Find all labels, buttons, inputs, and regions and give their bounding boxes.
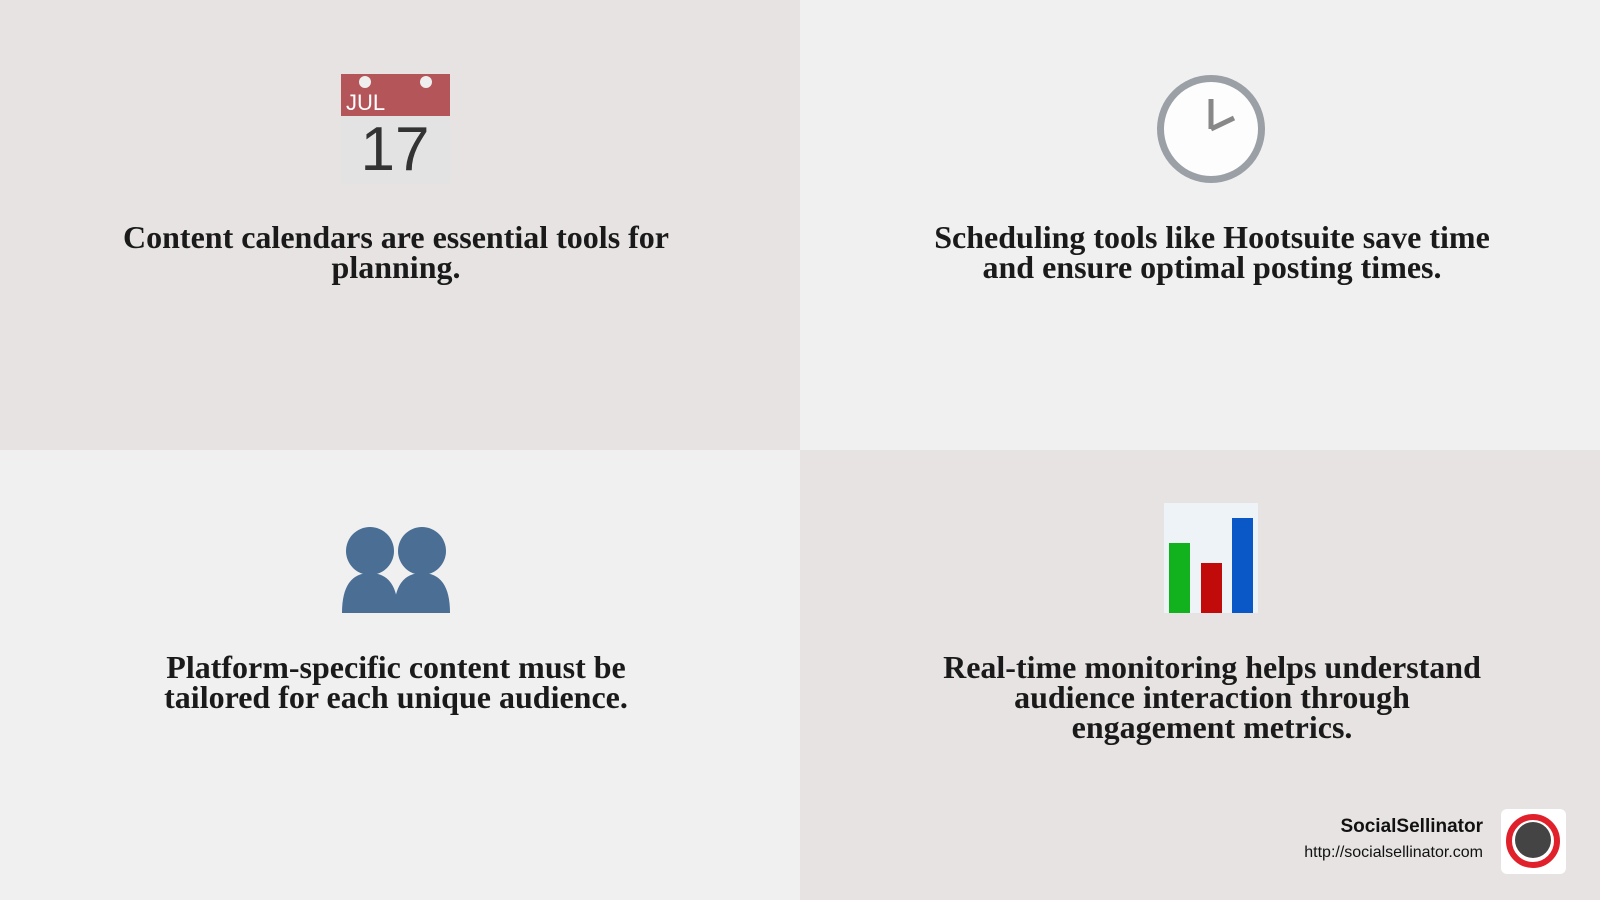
brand text	[1304, 816, 1483, 861]
text: scheduling: Scheduling tools like Hootsuite save time and ensure optimal posting times.	[934, 219, 1490, 285]
text: platform: Platform-specific content must be tailored for each unique audience.	[164, 649, 628, 715]
text: monitoring: Real-time monitoring helps understand audience interaction through engagement metrics.	[943, 649, 1481, 745]
icon: calendar: 17	[361, 115, 429, 184]
icon: people	[342, 527, 450, 613]
panel: scheduling	[800, 0, 1600, 450]
brand text: SocialSellinator	[1340, 816, 1483, 837]
panel: content calendars	[0, 0, 800, 450]
logo	[1501, 809, 1566, 874]
icon: clock	[1157, 75, 1265, 183]
icon: calendar	[341, 74, 450, 184]
panel: monitoring	[800, 450, 1600, 900]
text: calendars: Content calendars are essential tools for planning.	[123, 219, 669, 285]
icon: calendar: JUL	[346, 90, 385, 115]
panel: platform-specific	[0, 450, 800, 900]
brand text: http://socialsellinator.com	[1304, 844, 1483, 861]
icon: bar chart	[1164, 503, 1258, 613]
